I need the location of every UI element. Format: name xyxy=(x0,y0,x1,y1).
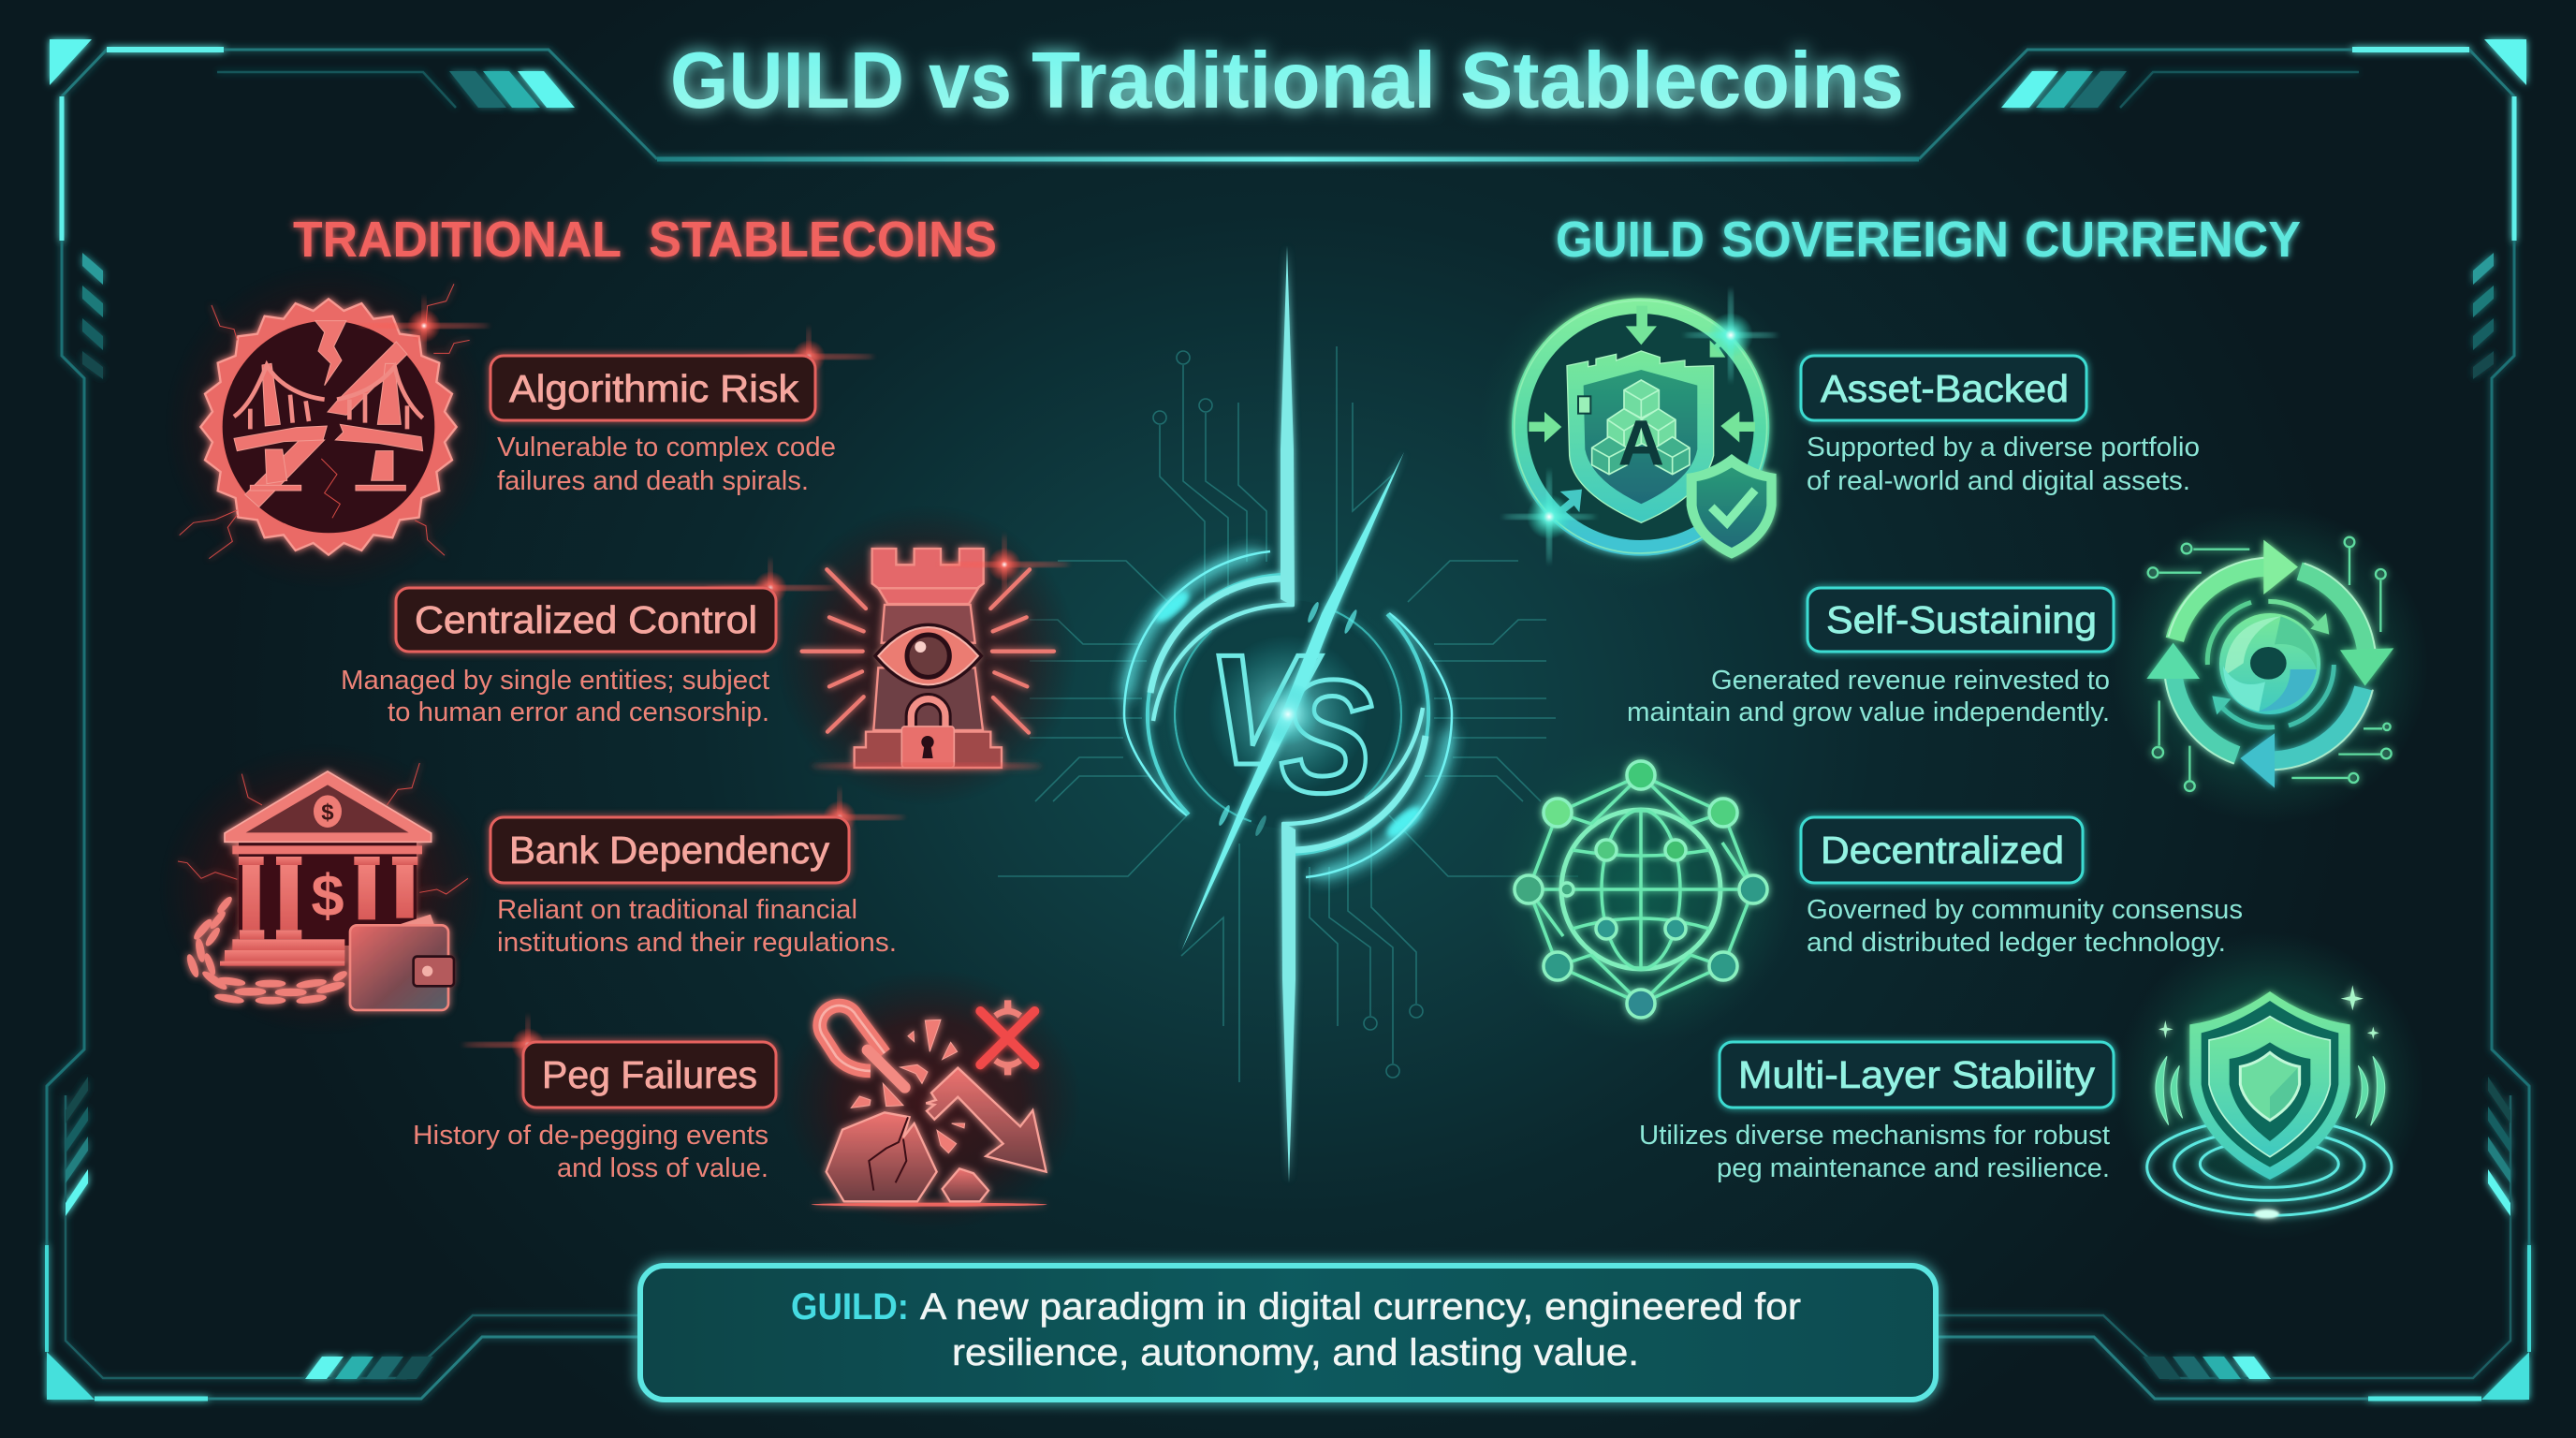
icon: asset-backed shield in ring: A xyxy=(1618,408,1664,479)
item: self-sustaining: Generated revenue reinvested to xyxy=(1711,666,2110,696)
icon: decentralized globe network xyxy=(1486,735,1795,1044)
label pill xyxy=(1720,1042,2114,1108)
item: asset-backed xyxy=(1801,356,2200,496)
label pill xyxy=(1801,817,2083,883)
heading: traditional stablecoins: STABLECOINS xyxy=(649,212,997,268)
item: bank dependency: institutions and their regulations. xyxy=(497,928,897,958)
heading: traditional stablecoins: TRADITIONAL xyxy=(293,212,622,268)
item: decentralized xyxy=(1801,817,2243,958)
bottom banner: GUILD: xyxy=(791,1286,909,1328)
bottom banner: A new paradigm in digital currency, engineered for xyxy=(920,1286,1801,1328)
item: asset-backed: Supported by a diverse portfolio xyxy=(1807,433,2200,462)
icon: tower with eye and lock xyxy=(777,506,1076,805)
item: algorithmic risk: failures and death spirals. xyxy=(497,466,809,496)
item: asset-backed: Asset-Backed xyxy=(1821,367,2069,410)
item: multi-layer stability xyxy=(1639,1042,2114,1183)
item: decentralized: Decentralized xyxy=(1821,829,2064,872)
item: multi-layer stability: peg maintenance and resilience. xyxy=(1717,1153,2110,1183)
icon: bank with chain and wallet: $ xyxy=(311,863,344,929)
heading: guild sovereign currency: GUILD xyxy=(1556,212,1705,268)
item: peg failures: and loss of value. xyxy=(557,1153,768,1183)
heading: guild sovereign currency xyxy=(1556,212,2301,268)
item: decentralized: Governed by community consensus xyxy=(1807,895,2243,925)
item: asset-backed: of real-world and digital assets. xyxy=(1807,466,2190,496)
heading: guild sovereign currency: SOVEREIGN xyxy=(1721,212,2009,268)
heading: traditional stablecoins xyxy=(293,212,997,268)
item: multi-layer stability: Multi-Layer Stability xyxy=(1738,1053,2096,1096)
title: GUILD xyxy=(670,37,904,125)
circuit traces behind VS xyxy=(998,346,1578,1082)
flare on pill xyxy=(743,327,874,387)
item: bank dependency: Reliant on traditional financial xyxy=(497,895,857,925)
item: self-sustaining xyxy=(1627,588,2114,727)
flare on pill xyxy=(462,1015,593,1075)
icon: self-sustaining cycle xyxy=(2111,506,2429,824)
label pill xyxy=(523,1042,776,1108)
bottom banner xyxy=(640,1266,1936,1400)
item: centralized control: Managed by single entities; subject xyxy=(341,666,769,696)
item: self-sustaining: Self-Sustaining xyxy=(1826,598,2097,641)
label pill xyxy=(1801,356,2086,420)
item: centralized control: to human error and censorship. xyxy=(388,697,769,727)
item: bank dependency: Bank Dependency xyxy=(509,829,829,872)
icon: bank with chain and wallet: $ xyxy=(321,800,334,825)
item: multi-layer stability: Utilizes diverse mechanisms for robust xyxy=(1639,1121,2110,1151)
icon: bank with chain and wallet xyxy=(159,744,487,1034)
icon: broken bridge seal xyxy=(165,263,492,591)
item: peg failures: History of de-pegging events xyxy=(413,1121,768,1151)
label pill xyxy=(396,588,776,652)
VS emblem xyxy=(1124,246,1452,1182)
item: peg failures: Peg Failures xyxy=(542,1053,757,1096)
item: centralized control xyxy=(341,558,836,727)
title: Stablecoins xyxy=(1460,37,1904,125)
heading: guild sovereign currency: CURRENCY xyxy=(2025,212,2301,268)
title: Traditional xyxy=(1032,37,1436,125)
item: algorithmic risk xyxy=(490,327,874,496)
icon: asset-backed shield in ring xyxy=(1479,262,1807,590)
item: centralized control: Centralized Control xyxy=(415,598,757,641)
item: peg failures xyxy=(413,1015,776,1183)
title xyxy=(670,37,1904,125)
VS emblem: V xyxy=(1206,622,1322,798)
flare on pill xyxy=(774,787,905,847)
item: algorithmic risk: Vulnerable to complex code xyxy=(497,433,836,462)
bottom banner: resilience, autonomy, and lasting value. xyxy=(952,1332,1639,1373)
title: vs xyxy=(929,37,1012,125)
item: bank dependency xyxy=(490,787,905,958)
icon: multi-layer shield xyxy=(2115,932,2424,1240)
item: decentralized: and distributed ledger technology. xyxy=(1807,928,2226,958)
label pill xyxy=(490,817,849,883)
item: self-sustaining: maintain and grow value independently. xyxy=(1627,697,2110,727)
item: algorithmic risk: Algorithmic Risk xyxy=(509,367,799,410)
label pill xyxy=(1808,588,2114,652)
label pill xyxy=(490,356,815,420)
VS emblem: S xyxy=(1280,647,1373,827)
icon: broken chain and falling arrow xyxy=(782,969,1081,1231)
flare on pill xyxy=(705,558,836,618)
